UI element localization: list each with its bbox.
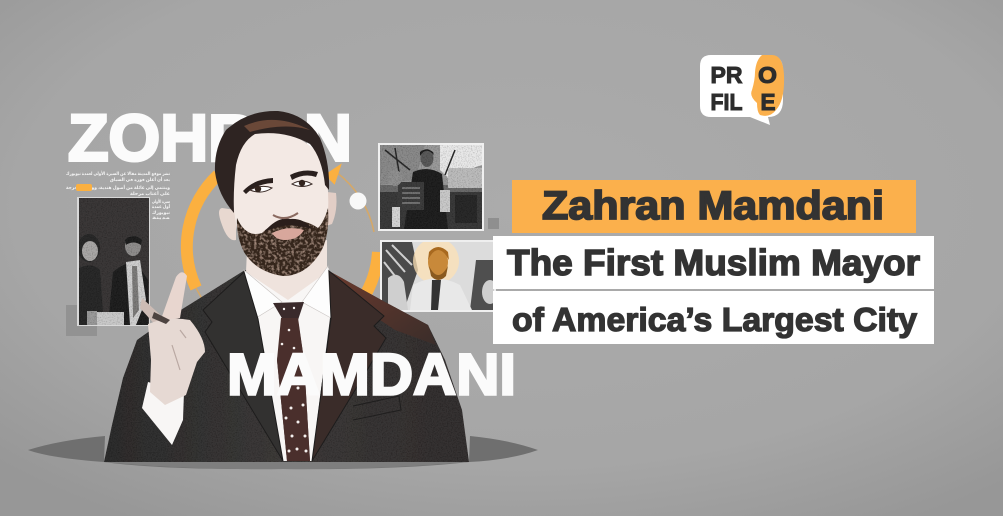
- decorative square: left: [66, 305, 97, 336]
- title bar: second line: [493, 291, 934, 344]
- title bar: second line: of America’s Largest City: [512, 301, 918, 338]
- jacket pocket: [353, 396, 401, 420]
- heading: MAMDANI: MAMDANI: [227, 342, 516, 408]
- head: [215, 111, 336, 276]
- title bar: name: [512, 180, 916, 233]
- title bar: first line: The First Muslim Mayor: [507, 242, 920, 283]
- heading: ZOHRAN: ZOHRAN: [68, 100, 352, 174]
- title bar: name: Zahran Mamdani: [542, 184, 884, 228]
- beard: [237, 208, 328, 276]
- lips: [272, 228, 304, 240]
- logo: PROFILE speech bubble: O: [758, 62, 777, 88]
- ground shadow ellipse: [28, 436, 538, 469]
- shirt: [243, 268, 330, 461]
- photo: protest with sign: [378, 143, 484, 231]
- decorative square: right: [488, 218, 499, 229]
- tie: [273, 302, 310, 461]
- hair: [215, 111, 329, 213]
- shirt cuff: [142, 382, 184, 445]
- newspaper text: بعد أن أعلن فوزه في السباق: [110, 176, 170, 182]
- neck: [246, 240, 327, 300]
- logo: PROFILE speech bubble: PR: [710, 62, 743, 88]
- left lapel: [203, 272, 283, 461]
- photo: couple, newspaper clipping: [77, 197, 150, 326]
- newspaper text: مدينة: [152, 215, 170, 220]
- white dot: [350, 192, 366, 210]
- logo: PROFILE speech bubble: [700, 55, 784, 125]
- jacket: [104, 270, 469, 462]
- person: Zahran Mamdani: [104, 111, 469, 462]
- newspaper text: وينتمي إلى عائلة من أصول هندية، ووالدته مخرجة: [66, 184, 170, 191]
- collar: [244, 266, 331, 318]
- newspaper text: أول عمدة: [152, 203, 170, 209]
- eyebrows: [243, 171, 318, 194]
- highlight on newspaper text: [76, 184, 92, 191]
- orange ring: [187, 167, 378, 306]
- nose: [273, 213, 298, 218]
- face: [231, 130, 328, 274]
- newspaper text: [66, 170, 170, 220]
- newspaper text: نشر موقع المدينة مقالا عن السيرة الأولى لعمدة نيويورك: [66, 170, 170, 176]
- logo: PROFILE speech bubble: E: [760, 89, 776, 115]
- newspaper text: نيويورك: [152, 210, 170, 215]
- newspaper text: على أعتاب مرحلة: [130, 190, 170, 196]
- newspaper text: سيرة الأولى: [152, 198, 170, 204]
- mustache: [264, 219, 312, 232]
- jacket shoulder highlight: [329, 271, 436, 345]
- logo: PROFILE speech bubble: FIL: [710, 89, 742, 115]
- hand and finger: [140, 272, 205, 405]
- photo: street portrait with highlighted face: [380, 238, 498, 312]
- eyes: [250, 181, 312, 192]
- right lapel: [312, 271, 386, 461]
